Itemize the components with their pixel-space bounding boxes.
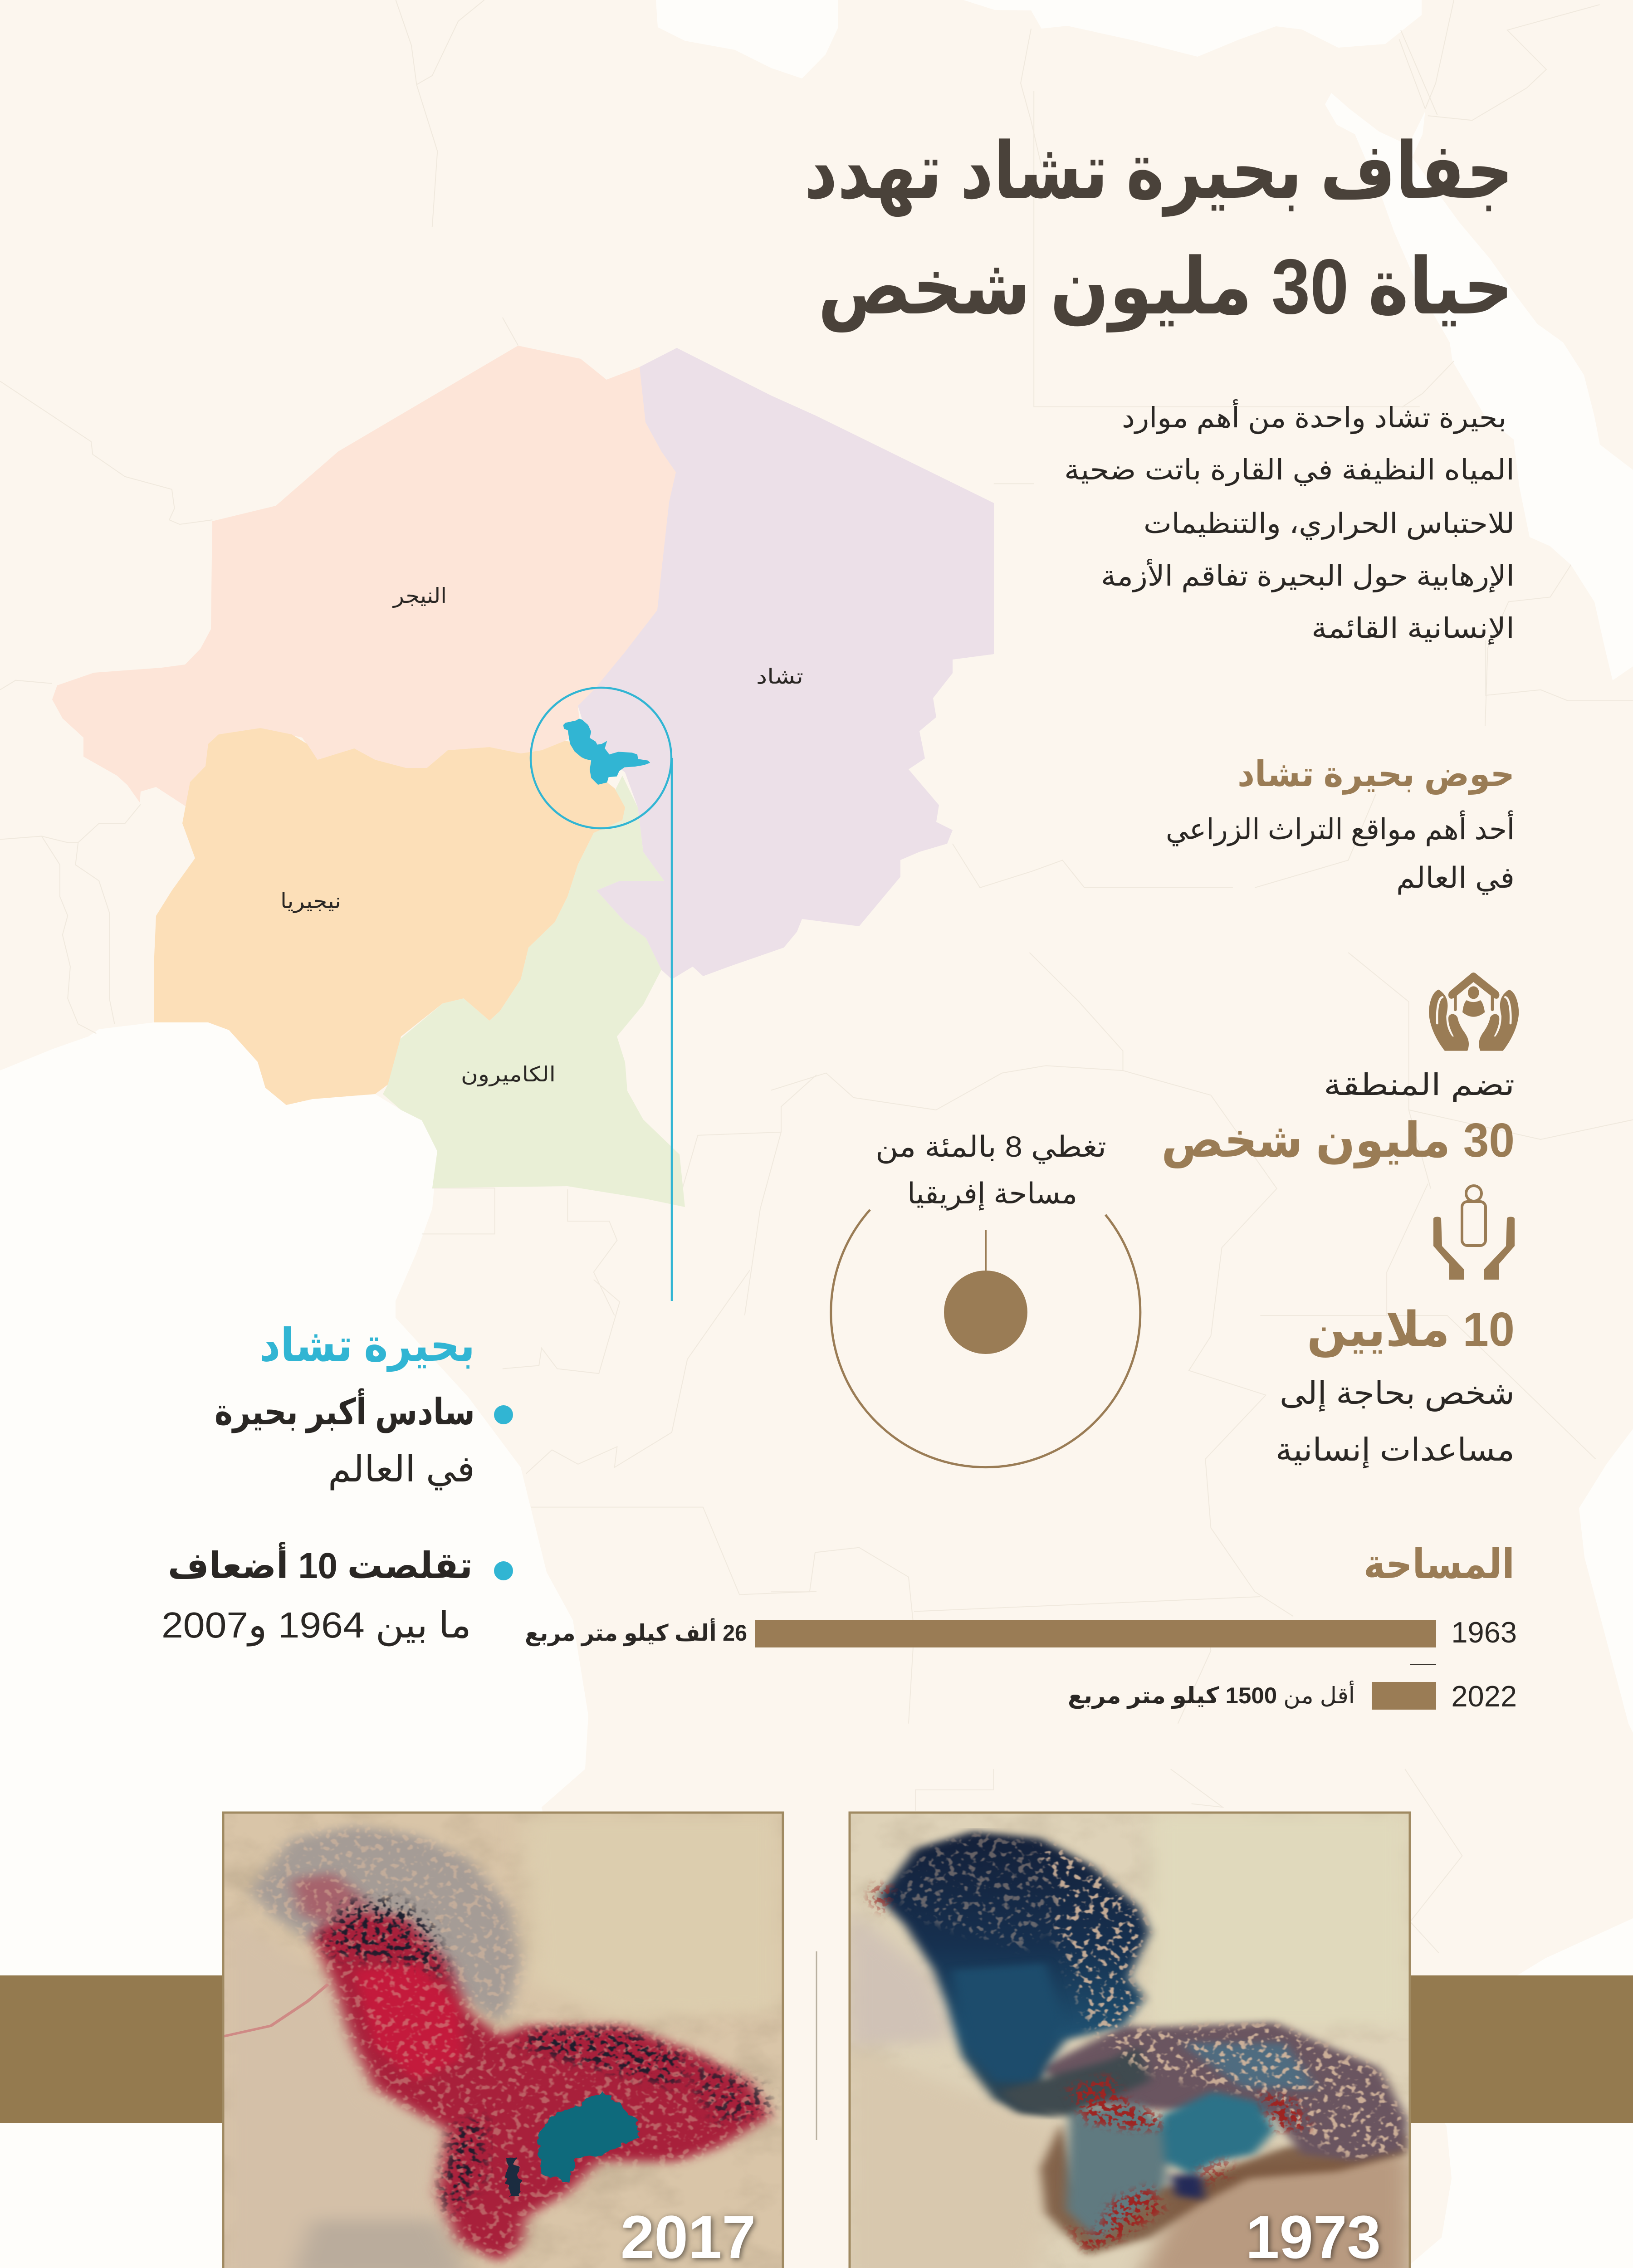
bar chart: lake area bbox=[525, 1542, 1517, 1713]
label: Cameroon: الكاميرون bbox=[461, 1062, 556, 1087]
stat: 10 million in need of aid: 10 ملايين bbox=[1307, 1303, 1515, 1358]
icon: hands holding person bbox=[1433, 1186, 1515, 1280]
fact two bbox=[161, 1542, 473, 1647]
stat text bbox=[875, 1130, 1106, 1211]
label: Nigeria: نيجيريا bbox=[280, 889, 341, 914]
bullet bbox=[494, 1561, 513, 1580]
heading: حوض بحيرة تشاد bbox=[1237, 754, 1515, 795]
country: Niger bbox=[52, 346, 676, 807]
intro text block: الإنسانية القائمة bbox=[1311, 613, 1515, 645]
year 2022: 2022 bbox=[1451, 1680, 1517, 1713]
section: Lake Chad basin bbox=[1166, 754, 1515, 895]
country: Chad bbox=[578, 348, 994, 979]
fact one: سادس أكبر بحيرة bbox=[215, 1388, 475, 1433]
stat text: مساحة إفريقيا bbox=[907, 1177, 1077, 1211]
fact one bbox=[215, 1388, 475, 1491]
brown band behind photos bbox=[0, 1975, 1633, 2123]
title: حياة 30 مليون شخص bbox=[818, 243, 1513, 332]
callout circle and leader line bbox=[531, 688, 672, 1301]
intro text block bbox=[1064, 399, 1515, 645]
intro text block: بحيرة تشاد واحدة من أهم موارد bbox=[1122, 399, 1506, 434]
map: countries around Lake Chad bbox=[52, 346, 994, 1301]
heading: المساحة bbox=[1364, 1542, 1515, 1587]
stat: 10 million in need of aid bbox=[1276, 1303, 1515, 1469]
photo: Lake Chad 1973 bbox=[848, 1812, 1411, 2268]
fact one: في العالم bbox=[328, 1449, 475, 1491]
basin description bbox=[1166, 810, 1515, 895]
intro text block: الإرهابية حول البحيرة تفاقم الأزمة bbox=[1101, 558, 1515, 593]
fact two: تقلصت 10 أضعاف bbox=[168, 1542, 473, 1586]
stat: 30 million people: 30 مليون شخص bbox=[1161, 1114, 1515, 1168]
basin description: أحد أهم مواقع التراث الزراعي bbox=[1166, 810, 1515, 846]
country: Nigeria bbox=[154, 728, 625, 1105]
proportion circle chart bbox=[831, 1210, 1140, 1467]
stat: 10 million in need of aid: مساعدات إنسانية bbox=[1276, 1432, 1515, 1469]
label: Niger: النيجر bbox=[392, 584, 447, 608]
value 2022: أقل من 1500 كيلو متر مربع bbox=[1068, 1681, 1355, 1709]
stat: 30 million people bbox=[1161, 1068, 1515, 1168]
title: جفاف بحيرة تشاد تهدد bbox=[804, 127, 1513, 217]
bar 1963 bbox=[755, 1620, 1436, 1647]
intro text block: للاحتباس الحراري، والتنظيمات bbox=[1144, 508, 1515, 540]
heading: بحيرة تشاد bbox=[259, 1320, 475, 1372]
stat: 10 million in need of aid: شخص بحاجة إلى bbox=[1280, 1375, 1515, 1412]
stat text: تغطي 8 بالمئة من bbox=[875, 1130, 1106, 1164]
stat: 8 percent of Africa bbox=[831, 1130, 1140, 1467]
year 1963: 1963 bbox=[1451, 1616, 1517, 1649]
lake shape bbox=[563, 719, 650, 785]
stat: 30 million people: تضم المنطقة bbox=[1324, 1068, 1515, 1102]
country: Cameroon bbox=[383, 776, 685, 1207]
title bbox=[804, 127, 1513, 332]
icon: hands protecting house and person bbox=[1429, 973, 1519, 1051]
value 1963: 26 ألف كيلو متر مربع bbox=[525, 1618, 747, 1647]
intro text block: المياه النظيفة في القارة باتت ضحية bbox=[1064, 455, 1515, 486]
fact two: ما بين 1964 و2007 bbox=[161, 1605, 471, 1647]
basin description: في العالم bbox=[1396, 861, 1515, 895]
panel: Lake Chad facts bbox=[161, 1320, 513, 1647]
label: Chad: تشاد bbox=[756, 665, 803, 688]
photo: Lake Chad 2017 bbox=[222, 1812, 784, 2268]
bar 2022 bbox=[1372, 1682, 1436, 1710]
bullet bbox=[494, 1405, 513, 1424]
